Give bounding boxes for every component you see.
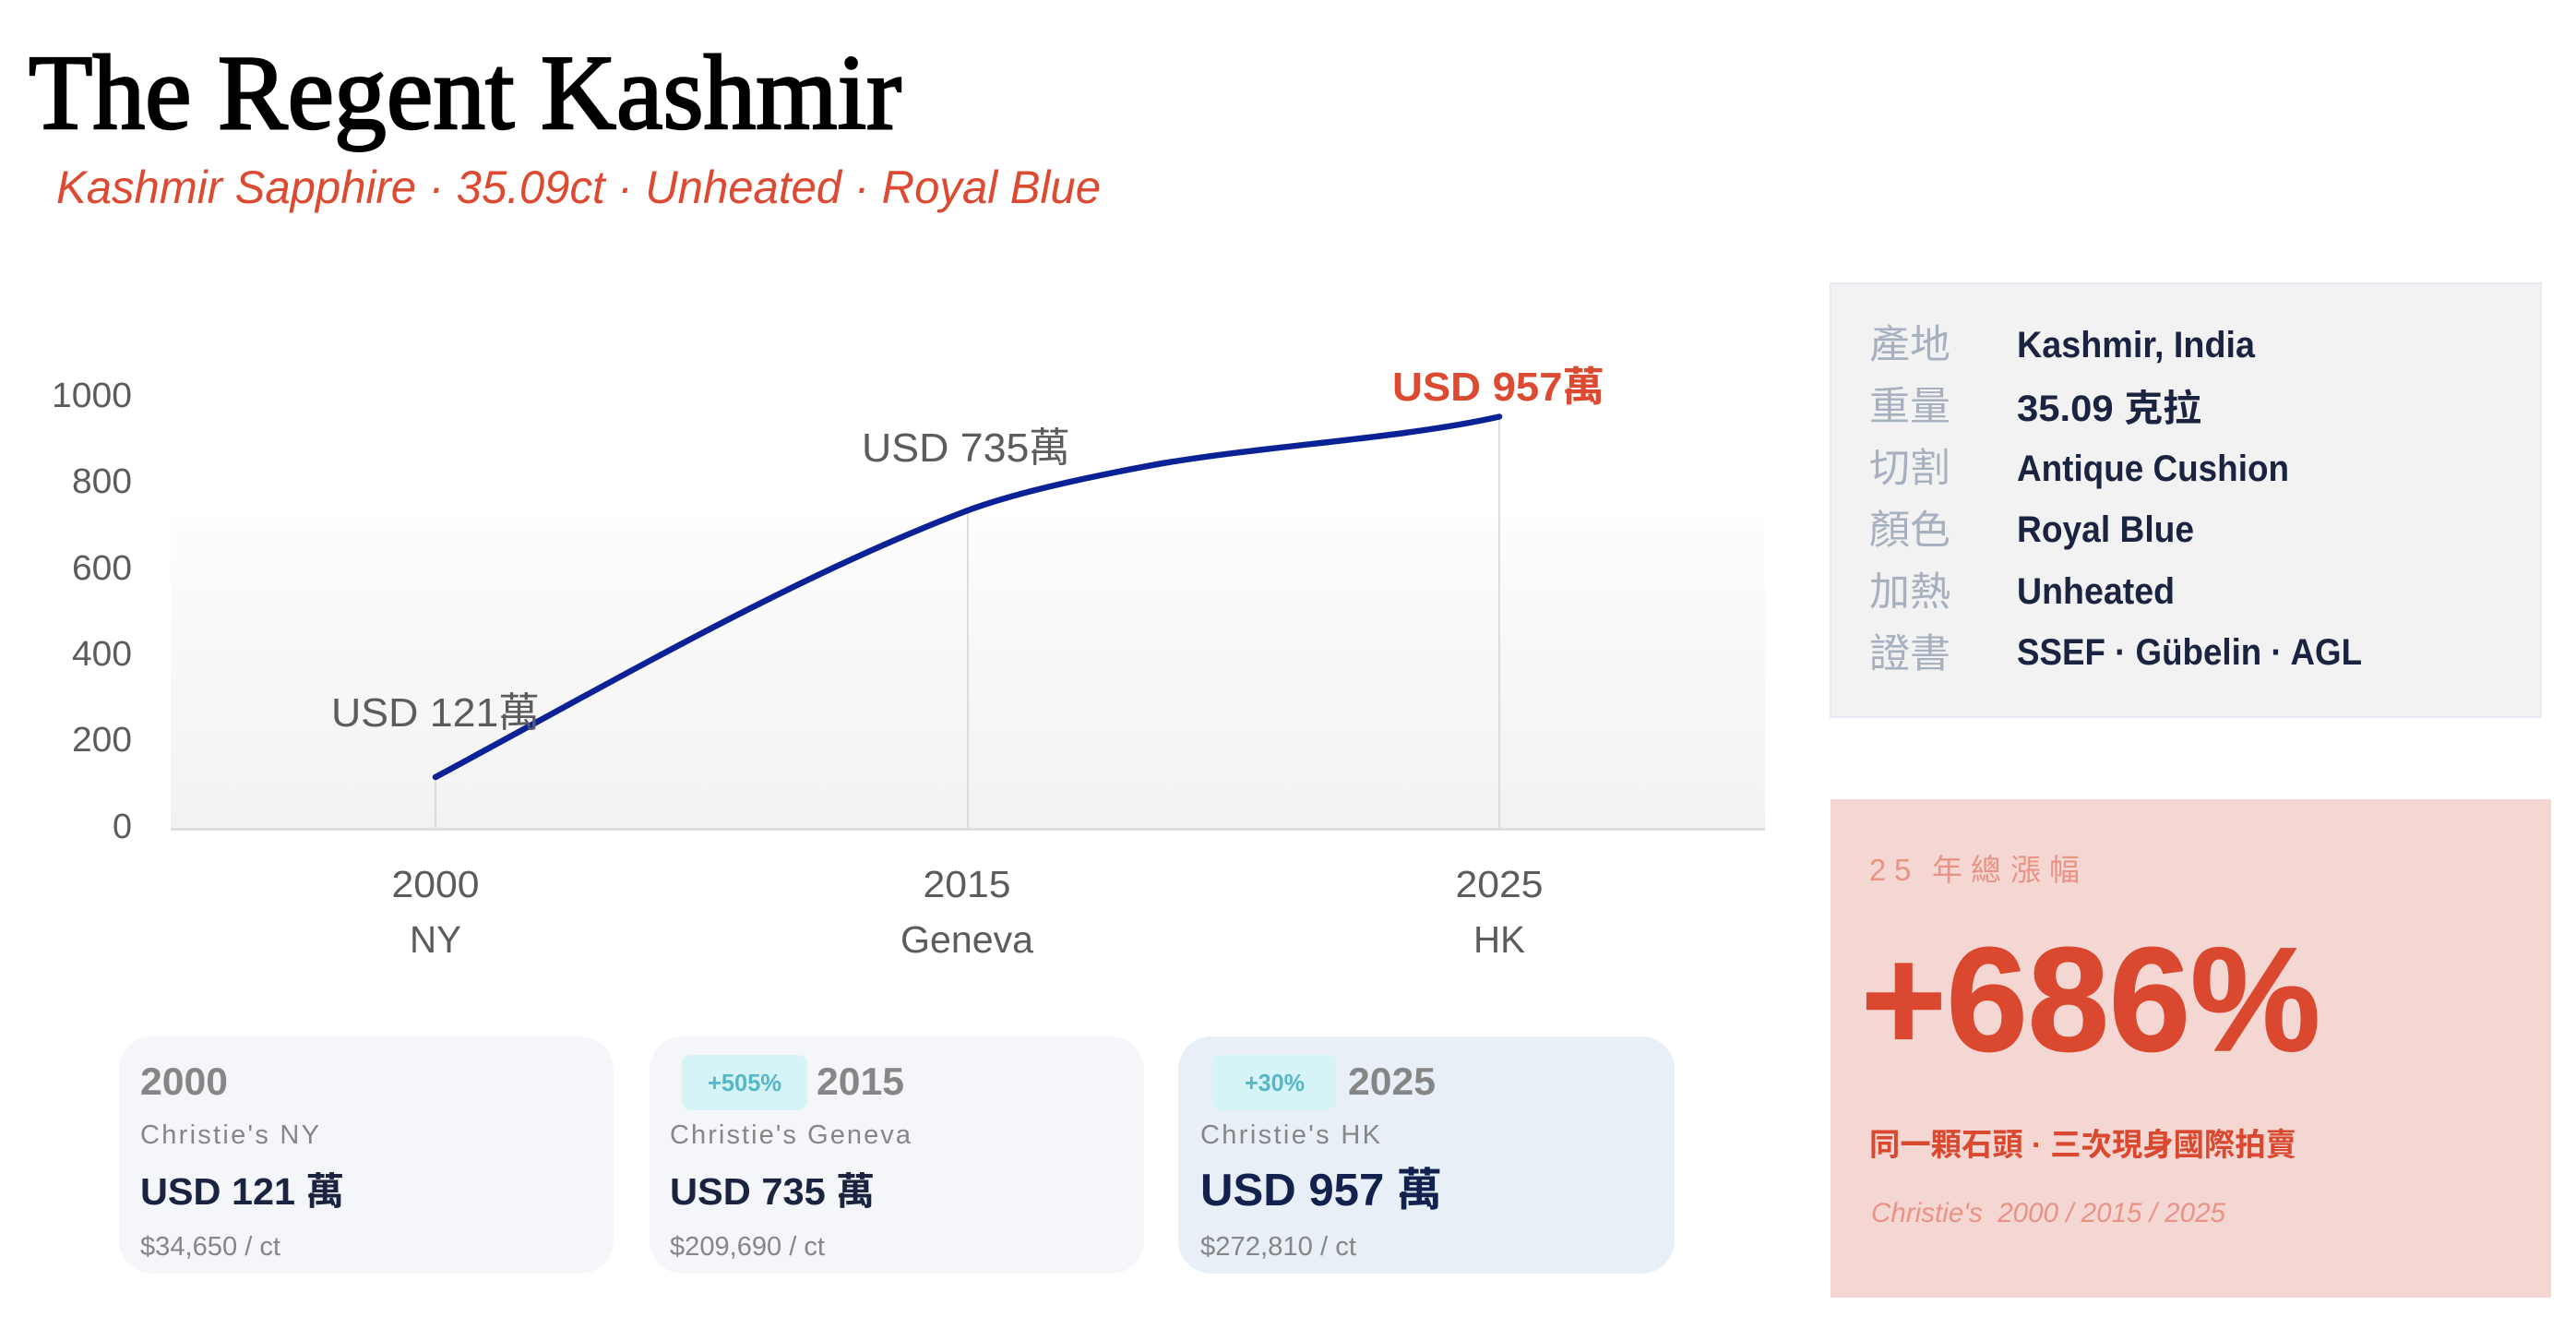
panel: total gain callout (1831, 799, 2551, 1298)
callout heading: 2 5 年總漲幅 (1869, 853, 2080, 887)
data label 2015: USD 735萬 (862, 425, 1070, 471)
card background (650, 1036, 1144, 1274)
subtitle: Kashmir Sapphire · 35.09ct · Unheated · Royal Blue (56, 162, 1101, 213)
x axis labels: Geneva (900, 918, 1033, 961)
spec values: Kashmir, India (2017, 325, 2256, 365)
y axis labels (52, 377, 132, 846)
venue: Christie's Geneva (670, 1120, 912, 1150)
panel background (1831, 283, 2541, 717)
year: 2000 (140, 1060, 228, 1103)
growth badge (682, 1055, 807, 1110)
card: 2000 sale (119, 1036, 614, 1274)
y axis labels: 400 (72, 635, 132, 674)
price per carat: $209,690 / ct (670, 1232, 825, 1262)
spec values: Unheated (2017, 571, 2175, 612)
venue: Christie's NY (140, 1120, 319, 1150)
card: 2015 sale (650, 1036, 1144, 1274)
plot background (171, 519, 1765, 828)
data label 2025: USD 957萬 (1392, 365, 1604, 410)
spec values: Royal Blue (2017, 509, 2194, 550)
growth badge (1211, 1055, 1336, 1110)
price per carat: $272,810 / ct (1200, 1232, 1356, 1262)
price curve (435, 417, 1499, 777)
price: USD 121 萬 (140, 1170, 344, 1213)
panel: specifications (1831, 283, 2541, 717)
growth badge: +505% (708, 1069, 781, 1096)
x axis labels (391, 863, 1543, 961)
spec labels: 重量 (1869, 385, 1950, 429)
spec values (2017, 325, 2362, 673)
price per carat: $34,650 / ct (140, 1232, 280, 1262)
x axis labels: 2000 (391, 863, 480, 905)
price: USD 735 萬 (670, 1170, 875, 1213)
spec labels: 證書 (1869, 632, 1950, 676)
spec labels: 切割 (1869, 447, 1950, 491)
venue: Christie's HK (1200, 1120, 1381, 1150)
card background (1178, 1036, 1675, 1274)
price: USD 957 萬 (1200, 1166, 1442, 1215)
callout background (1831, 799, 2551, 1298)
spec labels: 產地 (1869, 323, 1950, 367)
spec values: 35.09 克拉 (2017, 389, 2201, 429)
spec labels: 顏色 (1869, 509, 1950, 553)
big percentage: +686% (1861, 916, 2320, 1082)
y axis labels: 0 (113, 808, 132, 846)
line chart: price history (52, 365, 1765, 961)
x axis labels: 2025 (1456, 863, 1543, 905)
spec labels (1869, 323, 1950, 676)
x axis labels: NY (410, 918, 461, 961)
y axis labels: 800 (72, 462, 132, 501)
y axis labels: 1000 (52, 377, 132, 415)
callout description: 同一顆石頭 · 三次現身國際拍賣 (1869, 1128, 2296, 1163)
x axis line (171, 828, 1765, 831)
growth badge: +30% (1245, 1069, 1305, 1096)
title: The Regent Kashmir (29, 34, 901, 152)
year: 2015 (817, 1060, 904, 1103)
spec labels: 加熱 (1869, 570, 1950, 615)
year: 2025 (1348, 1060, 1436, 1103)
x axis labels: HK (1473, 918, 1525, 961)
drop lines (435, 417, 1499, 829)
x axis labels: 2015 (923, 863, 1011, 905)
data label 2000: USD 121萬 (331, 690, 540, 736)
y axis labels: 200 (72, 721, 132, 760)
card background (119, 1036, 614, 1274)
spec values: SSEF · Gübelin · AGL (2017, 632, 2362, 673)
spec values: Antique Cushion (2017, 449, 2289, 489)
card: 2025 sale (1178, 1036, 1675, 1274)
y axis labels: 600 (72, 549, 132, 588)
callout source: Christie's 2000 / 2015 / 2025 (1871, 1198, 2225, 1228)
